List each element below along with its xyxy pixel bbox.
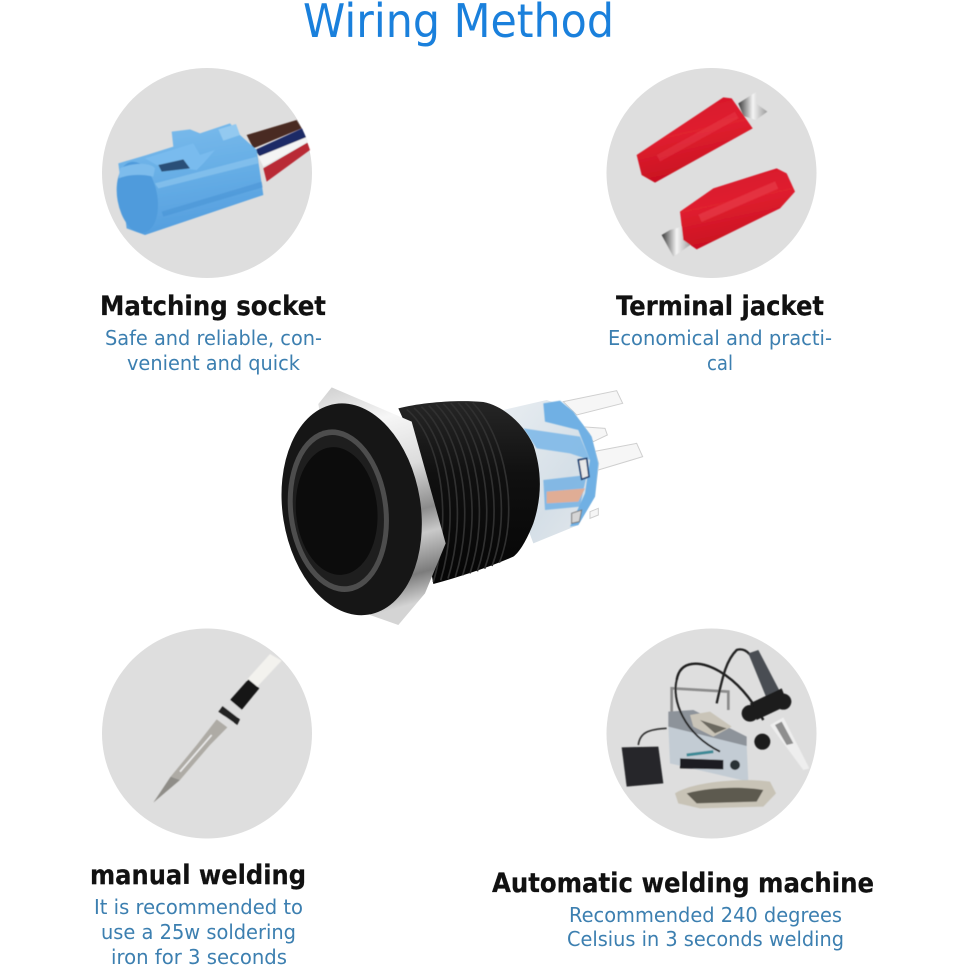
heading: manual welding: manual welding xyxy=(90,860,306,891)
circle: jacket background xyxy=(606,68,816,278)
text: machine description: Recommended 240 degrees xyxy=(569,903,842,927)
circle: machine background xyxy=(606,628,816,838)
text: manual welding description: It is recommended to xyxy=(94,895,303,919)
text: jacket description xyxy=(608,326,832,375)
circle: manual welding background xyxy=(102,628,312,838)
text: manual welding description xyxy=(94,895,303,966)
icon: soldering iron xyxy=(153,654,282,803)
panel: terminal jacket xyxy=(606,68,832,375)
LED ring xyxy=(279,424,398,598)
heading: automatic welding machine: Automatic welding machine xyxy=(492,868,874,899)
heading: matching socket: Matching socket xyxy=(100,291,326,322)
text: machine description xyxy=(567,903,844,951)
panel: matching socket xyxy=(100,68,326,375)
circle: socket background xyxy=(102,68,312,278)
text: machine description: Celsius in 3 seconds welding xyxy=(567,927,844,951)
text: manual welding description: use a 25w soldering xyxy=(101,920,296,944)
icon: welding machine xyxy=(622,649,809,808)
panel: manual welding xyxy=(90,628,312,966)
panel: automatic welding machine xyxy=(492,628,874,951)
icon: red terminal jackets xyxy=(637,92,795,257)
text: jacket description: cal xyxy=(707,351,733,375)
hex nut xyxy=(318,387,446,625)
icon: black push button switch xyxy=(267,387,643,625)
heading: terminal jacket: Terminal jacket xyxy=(616,291,824,322)
icon: blue connector with wires xyxy=(111,120,310,236)
threaded barrel xyxy=(398,401,540,584)
text: jacket description: Economical and practi- xyxy=(608,326,832,350)
button face xyxy=(267,393,437,625)
text: socket description: Safe and reliable, con- xyxy=(105,326,322,350)
terminal pins xyxy=(563,391,643,518)
rear housing xyxy=(503,400,599,543)
text: socket description xyxy=(105,326,322,375)
button centre xyxy=(291,444,383,578)
text: socket description: venient and quick xyxy=(127,351,300,375)
